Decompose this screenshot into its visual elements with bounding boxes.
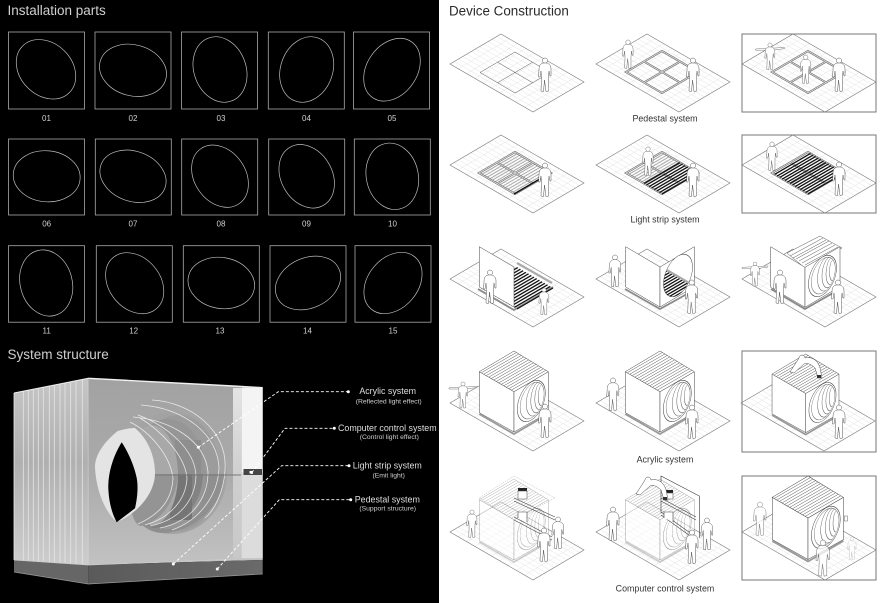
panel: system structure render xyxy=(14,378,263,584)
part 13: 13 xyxy=(216,326,225,336)
drawing: pedestal step 1 xyxy=(450,34,584,112)
drawing: pedestal step 3 framed xyxy=(742,34,876,112)
label: pedestal system: (Support structure) xyxy=(359,506,416,513)
pedestal base left xyxy=(14,560,88,584)
part 11: 11 xyxy=(43,326,51,336)
base bottom edge xyxy=(14,572,263,584)
drawing: acrylic step 5 cube xyxy=(596,351,730,451)
front top highlight xyxy=(88,378,263,388)
drawing: acrylic step 1 wall xyxy=(450,247,584,327)
part 11 xyxy=(8,244,84,336)
drawing: light strip step 2 xyxy=(596,135,730,213)
part 02 xyxy=(94,32,172,123)
control unit xyxy=(244,469,262,475)
part 06: 06 xyxy=(42,220,52,228)
panel: dark left background xyxy=(0,0,439,603)
panel: installation parts grid xyxy=(4,28,434,335)
drawing: computer control step 2 xyxy=(596,476,730,580)
label: acrylic system xyxy=(356,386,422,406)
part 04 xyxy=(268,29,344,123)
part 07: 07 xyxy=(129,220,138,228)
caption: pedestal system: Pedestal system xyxy=(632,114,698,124)
white lens xyxy=(95,428,155,522)
part 07 xyxy=(92,139,174,228)
part 12 xyxy=(94,241,176,336)
label: computer control system: (Control light effect) xyxy=(360,434,419,441)
drawing: acrylic step 3 walls and roof xyxy=(742,236,876,327)
label: pedestal system: Pedestal system xyxy=(355,495,420,505)
part 13 xyxy=(183,246,259,336)
label: computer control system: Computer control system xyxy=(338,423,437,433)
drawing: acrylic step 4 cube xyxy=(449,351,584,451)
part 05: 05 xyxy=(388,114,397,123)
part 12: 12 xyxy=(129,326,139,336)
leader: pedestal system xyxy=(216,498,352,570)
drawing: pedestal step 2 xyxy=(596,34,730,112)
label: light strip system: (Emit light) xyxy=(372,473,405,480)
drawing: acrylic step 6 cube framed xyxy=(741,351,876,452)
part 15: 15 xyxy=(389,326,398,336)
side light column xyxy=(233,388,242,558)
leader: acrylic system xyxy=(197,390,350,449)
part 14 xyxy=(267,246,349,336)
part 05 xyxy=(352,28,432,123)
part 03 xyxy=(182,29,258,123)
black opening xyxy=(108,442,138,522)
label: light strip system xyxy=(353,461,422,480)
caption: acrylic system: Acrylic system xyxy=(637,454,693,464)
heading: installation parts: Installation parts xyxy=(8,3,106,18)
part 09: 09 xyxy=(302,220,311,228)
drawing: acrylic step 2 walls and opening xyxy=(596,247,730,327)
front face xyxy=(88,378,263,565)
leader: computer control system xyxy=(250,427,336,474)
label: light strip system: Light strip system xyxy=(353,461,422,471)
part 01 xyxy=(4,28,88,123)
label: computer control system xyxy=(338,423,437,441)
acrylic rings xyxy=(130,400,225,530)
caption: light strip system: Light strip system xyxy=(630,215,700,225)
part 14: 14 xyxy=(303,326,312,336)
opening shell rings xyxy=(117,412,227,534)
leader: light strip system xyxy=(172,464,350,566)
drawing: light strip step 3 framed xyxy=(742,135,876,213)
label: pedestal system xyxy=(355,495,420,513)
label: acrylic system: Acrylic system xyxy=(359,386,416,396)
base top edge xyxy=(14,558,263,565)
part 03: 03 xyxy=(217,114,226,123)
part 06 xyxy=(8,139,84,228)
drawing: computer control step 1 xyxy=(450,476,584,580)
caption: computer control system: Computer control system xyxy=(616,583,714,593)
heading: system structure: System structure xyxy=(8,347,109,362)
part 01: 01 xyxy=(42,114,51,123)
reflection line xyxy=(152,474,241,476)
part 15 xyxy=(352,241,434,336)
part 10: 10 xyxy=(388,220,397,228)
heading: device construction: Device Construction xyxy=(449,3,569,18)
part 08: 08 xyxy=(217,220,226,228)
white control panel lower xyxy=(242,473,263,558)
left strip face xyxy=(14,378,88,565)
part 08 xyxy=(180,134,260,228)
drawing: computer control step 3 framed xyxy=(742,476,876,580)
drawing: light strip step 1 xyxy=(450,135,584,213)
pedestal base front xyxy=(88,560,263,584)
part 09 xyxy=(268,135,346,228)
part 10 xyxy=(354,138,430,228)
label: acrylic system: (Reflected light effect) xyxy=(356,399,422,406)
part 02: 02 xyxy=(129,114,138,123)
white control panel upper xyxy=(242,388,263,473)
part 04: 04 xyxy=(302,114,311,123)
